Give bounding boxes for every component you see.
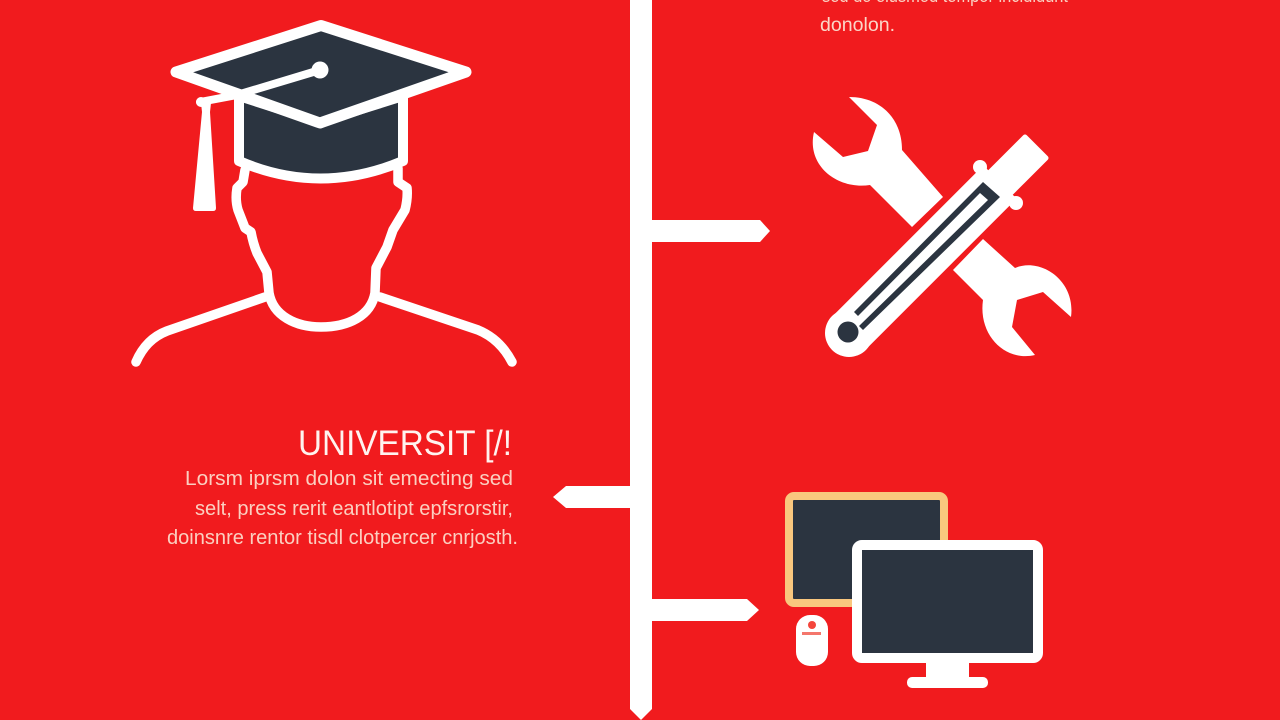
collar bump right <box>1009 196 1023 210</box>
left shoulder <box>136 297 265 362</box>
front monitor stand <box>926 660 969 680</box>
tassel <box>193 103 216 211</box>
icon: graduate with mortarboard <box>136 26 512 362</box>
screwdriver handle <box>984 137 1046 199</box>
paragraph line 3: doinsnre rentor tisdl clotpercer cnrjosth. <box>167 527 518 549</box>
heading: UNIVERSIT [/! <box>298 424 512 463</box>
mouse logo label <box>802 632 821 635</box>
wrench <box>813 97 1071 356</box>
icon: crossed wrench and screwdriver <box>813 97 1071 357</box>
arrow: right to computers <box>650 599 759 621</box>
mouse logo mark <box>808 621 816 629</box>
mouse body <box>796 615 828 666</box>
dark hole <box>838 322 858 342</box>
dark slot <box>854 182 1000 330</box>
screwdriver <box>825 137 1046 357</box>
text block: university <box>167 424 518 549</box>
back monitor <box>789 496 944 603</box>
front monitor <box>857 545 1038 658</box>
text block: top right fragment <box>820 0 1068 36</box>
arrow: left to university text <box>553 486 632 508</box>
wrench lower head and handle <box>953 239 1071 356</box>
paragraph line 2: selt, press rerit eantlotipt epfsrorstir, <box>195 498 513 520</box>
tassel cord <box>200 70 320 102</box>
paragraph line 1: Lorsm iprsm dolon sit emecting sed <box>185 468 513 490</box>
screwdriver round end <box>825 309 873 357</box>
timeline with arrows <box>553 0 770 720</box>
mouse <box>796 615 828 666</box>
cap button <box>312 62 328 78</box>
icon: computers and mouse <box>789 496 1038 688</box>
cap board <box>176 26 466 123</box>
cap base <box>239 96 403 178</box>
screwdriver shaft <box>849 182 1000 333</box>
right shoulder <box>380 297 512 362</box>
collar bump left <box>973 160 987 174</box>
last word: donolon. <box>820 15 895 36</box>
vertical timeline bar <box>630 0 652 720</box>
head outline <box>236 168 407 327</box>
arrow: right to tools <box>650 220 770 242</box>
front monitor base <box>907 677 988 688</box>
tassel knot <box>196 97 206 107</box>
wrench upper head and handle <box>813 97 943 227</box>
